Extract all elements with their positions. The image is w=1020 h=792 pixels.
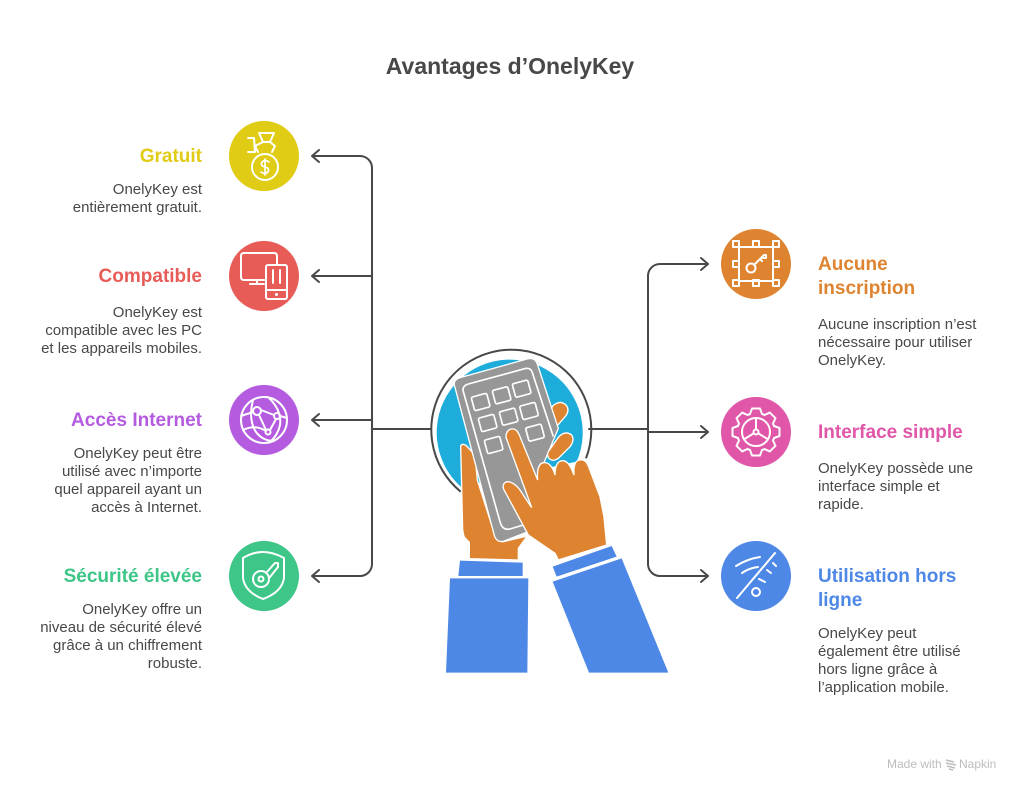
right cuff — [553, 546, 617, 577]
text: nécessaire pour utiliser — [818, 334, 972, 351]
fingertip — [547, 433, 573, 460]
text: l’application mobile. — [818, 679, 949, 696]
heading: Interface simple — [818, 422, 963, 443]
right sleeve — [553, 558, 668, 673]
watermark: Napkin — [959, 757, 996, 771]
text: robuste. — [148, 655, 202, 672]
text: quel appareil ayant un — [54, 481, 202, 498]
text: OnelyKey est — [113, 304, 203, 321]
arrows: left connectors — [312, 150, 430, 582]
icon: globe network — [229, 385, 299, 455]
text: utilisé avec n’importe — [62, 463, 202, 480]
panel: Gratuit — [73, 121, 299, 216]
heading: Accès Internet — [71, 410, 203, 431]
heading: Gratuit — [140, 146, 203, 167]
heading: Utilisation hors — [818, 566, 956, 587]
left cuff — [458, 561, 523, 576]
watermark: Made with — [887, 757, 942, 771]
heading: inscription — [818, 278, 915, 299]
text: OnelyKey est — [113, 181, 203, 198]
text: OnelyKey offre un — [82, 601, 202, 618]
blue disc — [437, 360, 583, 487]
finger behind keypad — [548, 402, 568, 428]
panel: Sécurité élevée — [40, 541, 299, 672]
panel: Utilisation hors ligne — [721, 541, 961, 696]
icon: wifi off — [721, 541, 791, 611]
heading: Sécurité élevée — [64, 566, 202, 587]
text: rapide. — [818, 496, 864, 513]
icon: key in frame — [721, 229, 791, 299]
text: hors ligne grâce à — [818, 661, 938, 678]
heading: Compatible — [99, 266, 202, 287]
text: accès à Internet. — [91, 499, 202, 516]
text: grâce à un chiffrement — [53, 637, 203, 654]
left hand — [461, 444, 527, 560]
central illustration: hands holding keypad — [431, 350, 668, 673]
text: OnelyKey. — [818, 352, 886, 369]
text: Aucune inscription n’est — [818, 316, 977, 333]
text: OnelyKey possède une — [818, 460, 973, 477]
panel: Accès Internet — [54, 385, 299, 516]
icon: gear — [721, 397, 791, 467]
text: OnelyKey peut être — [74, 445, 202, 462]
text: également être utilisé — [818, 643, 961, 660]
text: interface simple et — [818, 478, 941, 495]
watermark — [887, 757, 996, 771]
text: compatible avec les PC — [45, 322, 202, 339]
panel: Interface simple — [721, 397, 973, 513]
panel: Compatible — [41, 241, 299, 357]
disc outline — [431, 350, 591, 492]
heading: Aucune — [818, 254, 888, 275]
icon: devices — [229, 241, 299, 311]
keypad — [454, 358, 558, 542]
title: Avantages d’OnelyKey — [386, 53, 634, 79]
panel: Aucune inscription — [721, 229, 977, 369]
icon: shield key — [229, 541, 299, 611]
icon: money bag — [229, 121, 299, 191]
left sleeve — [446, 578, 528, 673]
text: OnelyKey peut — [818, 625, 917, 642]
heading: ligne — [818, 590, 862, 611]
text: entièrement gratuit. — [73, 199, 202, 216]
right hand — [503, 429, 607, 560]
text: et les appareils mobiles. — [41, 340, 202, 357]
text: niveau de sécurité élevé — [40, 619, 202, 636]
arrows: right connectors — [589, 258, 708, 582]
